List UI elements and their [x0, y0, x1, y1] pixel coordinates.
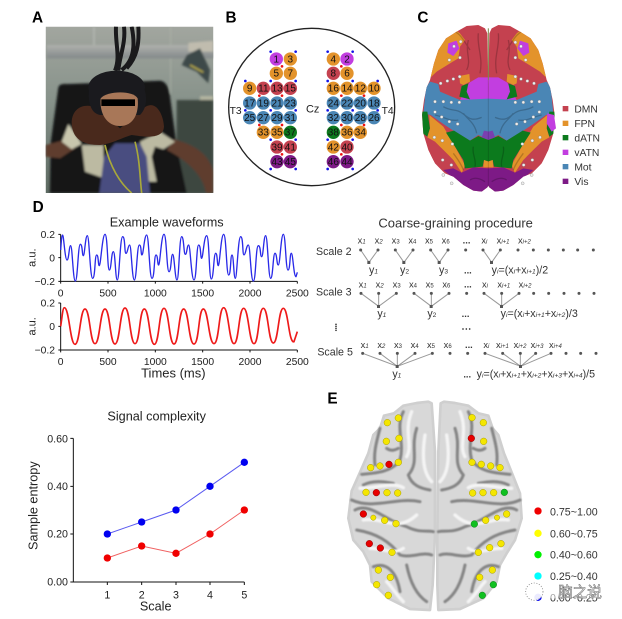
y tick labels: 0.00 [47, 577, 68, 589]
scale 2 diagram: y [400, 264, 406, 276]
scale 2 diagram [316, 236, 595, 276]
scale 3 diagram: x [442, 280, 447, 290]
red waveform chart: 1000 [144, 357, 167, 368]
scale 3 diagram: x [376, 280, 381, 290]
channel numbers: 6 [344, 69, 350, 80]
channel numbers: 41 [285, 142, 296, 153]
network legend: Vis [574, 177, 589, 188]
panel D: signal complexity chart [26, 410, 248, 614]
scale 2 diagram: x [358, 236, 363, 246]
scale 3 diagram: 1 [383, 312, 387, 319]
scale 5 diagram: 1 [365, 344, 369, 350]
scale 2 diagram: x [425, 236, 430, 246]
red waveform chart: 1500 [191, 357, 214, 368]
scale 5 diagram: i+2 [518, 344, 527, 350]
landmarks: Cz [306, 104, 319, 116]
x tick labels: 3 [173, 590, 179, 602]
blue waveform chart: 1500 [191, 288, 214, 299]
scale 5 diagram: x [549, 340, 554, 350]
yellow markers [363, 414, 510, 599]
head outline [229, 28, 395, 186]
label D: D [33, 199, 44, 216]
scale 3 diagram: x [426, 280, 431, 290]
scale 2 diagram: 1 [362, 240, 366, 246]
channel numbers: 21 [271, 98, 283, 109]
coarse-graining title: Coarse-graining procedure [378, 216, 533, 231]
scale 5 diagram: i [488, 344, 490, 350]
scale 3 diagram: x [409, 280, 414, 290]
scale 5 diagram: Scale 5 [317, 347, 353, 359]
red waveform chart: 0 [49, 322, 55, 333]
scale 3 diagram: 3 [397, 284, 401, 290]
red waveform chart: 2500 [286, 357, 309, 368]
scale 3 diagram [316, 280, 595, 320]
scale 2 diagram: x [442, 236, 447, 246]
probe positions [433, 40, 541, 185]
chart title: Signal complexity [107, 410, 207, 424]
landmarks: T3 [230, 106, 242, 117]
channel numbers: 30 [341, 113, 353, 124]
blue waveform chart: 2000 [239, 288, 262, 299]
scale 5 diagram: 6 [448, 344, 452, 350]
red waveform chart [27, 299, 309, 380]
scale 2 diagram: y [492, 264, 498, 276]
y axis title: Sample entropy [26, 461, 40, 550]
channel numbers: 36 [341, 128, 353, 139]
channel numbers: 3 [288, 54, 294, 65]
censor bar [101, 99, 135, 106]
y tick labels: 0.20 [47, 529, 68, 541]
channel numbers: 24 [328, 98, 339, 109]
red waveform chart: 0 [58, 357, 64, 368]
blue waveform chart: 0 [49, 253, 55, 264]
channel numbers: 20 [355, 98, 366, 109]
scale 2 diagram: 5 [430, 240, 434, 246]
scale 2 diagram: i+2 [523, 240, 531, 246]
network legend: FPN [574, 119, 595, 130]
scale 5 diagram: x [514, 340, 519, 350]
scale 5 diagram: 2 [381, 344, 386, 350]
channel numbers: 44 [341, 157, 353, 168]
scale 3 diagram: ... [464, 280, 472, 290]
red waveform chart: a.u. [27, 317, 39, 335]
scale 5 diagram: x [531, 340, 536, 350]
red waveform chart: Times (ms) [141, 365, 206, 380]
scale 2 diagram: 2 [405, 268, 409, 275]
scale 2 diagram: 6 [446, 240, 450, 246]
channel numbers: 37 [285, 128, 296, 139]
x tick labels: 4 [207, 590, 213, 602]
scale 3 diagram: 4 [414, 284, 418, 290]
scale 3 diagram: 2 [433, 312, 437, 319]
scale 5 diagram: i+1 [501, 344, 509, 350]
scale 5 diagram: y [392, 369, 398, 381]
channel numbers: 46 [328, 157, 339, 168]
network legend: vATN [574, 148, 599, 159]
channel numbers: 42 [328, 142, 339, 153]
scale 3 diagram: x [359, 280, 364, 290]
x axis title: Scale [140, 600, 172, 614]
channel numbers [244, 54, 380, 168]
network legend [563, 104, 600, 188]
scale 2 diagram: ... [464, 265, 472, 275]
scale 5 diagram: 4 [415, 344, 419, 350]
scale 5 diagram: x [444, 340, 449, 350]
scale 2 diagram: Scale 2 [316, 246, 352, 258]
red series [104, 506, 248, 562]
scale 5 diagram [317, 340, 597, 381]
x tick labels [104, 590, 247, 602]
blue waveform chart: 500 [99, 288, 117, 299]
blue waveform chart [27, 230, 309, 299]
value legend: 0.00~0.25 [550, 592, 598, 604]
scale 5 diagram: x [496, 340, 501, 350]
channel numbers: 34 [355, 128, 366, 139]
x tick labels: 5 [241, 590, 247, 602]
scale 2 diagram: y [439, 264, 445, 276]
panel A: photo of child wearing fNIRS cap [32, 9, 213, 193]
label A: A [32, 9, 43, 26]
channel numbers: 45 [285, 157, 296, 168]
channel numbers: 14 [341, 84, 353, 95]
channel numbers: 35 [271, 128, 283, 139]
channel numbers: 26 [368, 113, 380, 124]
scale 5 diagram: x [483, 340, 488, 350]
channel numbers: 28 [355, 113, 366, 124]
landmarks [230, 104, 394, 117]
blue waveform chart: a.u. [27, 249, 39, 267]
scale 2 diagram: x [375, 236, 380, 246]
axes [70, 438, 244, 585]
label E: E [327, 390, 338, 407]
scale 3 diagram: 6 [447, 284, 451, 290]
green markers [471, 489, 508, 599]
channel numbers: 13 [271, 84, 283, 95]
channel numbers: 40 [341, 142, 353, 153]
landmarks: T4 [382, 106, 394, 117]
channel numbers: 39 [271, 142, 283, 153]
y tick labels: 0.60 [47, 433, 68, 445]
channel numbers: 10 [368, 84, 380, 95]
scale 2 diagram: x [518, 236, 523, 246]
red waveform chart: −0.2 [35, 346, 55, 357]
scale 5 diagram: 5 [432, 344, 436, 350]
scale 3 diagram: y [377, 308, 383, 320]
channel numbers: 16 [328, 84, 339, 95]
channel numbers: 18 [368, 98, 380, 109]
source dots [258, 65, 365, 156]
channel numbers: 31 [285, 113, 296, 124]
panel D: coarse-graining procedure [316, 216, 597, 381]
channel numbers: 2 [344, 54, 350, 65]
blue waveform chart: 0.2 [41, 230, 55, 241]
channel numbers: 43 [271, 157, 283, 168]
scale 3 diagram: x [519, 280, 524, 290]
scale 5 diagram: x [361, 340, 366, 350]
network legend: Mot [574, 162, 592, 173]
scale 3 diagram: ... [462, 309, 469, 319]
panel C: brain network parcellation [417, 9, 600, 193]
scale 2 diagram: i+1 [501, 240, 509, 246]
scale 5 diagram: i=(xi+xi+1+xi+2+xi+3+xi+4)/5 [482, 369, 595, 381]
brain map [420, 23, 557, 193]
scale 3 diagram: i [487, 284, 489, 290]
label C: C [417, 9, 428, 26]
scale 5 diagram: 1 [398, 373, 402, 380]
scale 5 diagram: ... [463, 370, 471, 380]
scale 5 diagram: x [377, 340, 382, 350]
value legend [534, 507, 598, 604]
scale 2 diagram: i [486, 240, 488, 246]
channel numbers: 19 [258, 98, 269, 109]
blue waveform chart: 0 [58, 288, 64, 299]
scale 3 diagram: Scale 3 [316, 286, 352, 298]
blue waveform chart: −0.2 [35, 277, 55, 288]
value legend: 0.60~0.75 [550, 528, 598, 540]
panel B: electrode layout [225, 9, 395, 186]
channel numbers: 8 [331, 69, 337, 80]
scale 2 diagram: 2 [378, 240, 383, 246]
y tick labels: 0.40 [47, 481, 68, 493]
x tick labels: 1 [104, 590, 110, 602]
channel numbers: 27 [258, 113, 269, 124]
scale 5 diagram: x [411, 340, 416, 350]
channel numbers: 11 [258, 84, 269, 95]
scale 3 diagram: y [427, 308, 433, 320]
channel numbers: 22 [341, 98, 353, 109]
scale 3 diagram: x [393, 280, 398, 290]
scale 3 diagram: i=(xi+xi+1+xi+2)/3 [506, 308, 578, 320]
ellipsis between scales [335, 323, 470, 331]
red waveform chart: 2000 [239, 357, 262, 368]
panel E: brain map of values [327, 390, 605, 610]
scale 5 diagram: x [427, 340, 432, 350]
scale 5 diagram: 3 [399, 344, 403, 350]
channel numbers: 25 [244, 113, 256, 124]
blue waveform chart: 2500 [286, 288, 309, 299]
label B: B [225, 9, 237, 26]
channel numbers: 15 [285, 84, 296, 95]
grey brain surface [348, 402, 522, 610]
scale 2 diagram: 4 [413, 240, 417, 246]
scale 3 diagram: 2 [379, 284, 384, 290]
waveforms title: Example waveforms [110, 216, 224, 230]
scale 5 diagram: x [394, 340, 399, 350]
scale 3 diagram: i+1 [502, 284, 510, 290]
red waveform chart: 0.2 [41, 299, 55, 310]
scale 2 diagram: ... [463, 236, 470, 246]
scale 5 diagram: ... [465, 340, 473, 350]
scale 3 diagram: 1 [363, 284, 367, 290]
scale 2 diagram: y [369, 264, 375, 276]
electrode channels [243, 52, 381, 168]
scale 3 diagram: i+2 [523, 284, 532, 290]
blue series [104, 459, 248, 538]
value legend: 0.25~0.40 [550, 571, 598, 583]
scale 5 diagram: i+3 [535, 344, 544, 350]
x tick labels: 2 [139, 590, 145, 602]
red markers [360, 435, 475, 551]
scale 2 diagram: i=(xi+xi+1)/2 [497, 264, 548, 276]
scale 5 diagram: y [477, 369, 483, 381]
network legend: DMN [574, 104, 598, 115]
channel numbers: 5 [274, 69, 280, 80]
scale 2 diagram: x [481, 236, 486, 246]
scale 2 diagram: x [497, 236, 502, 246]
channel numbers: 12 [355, 84, 366, 95]
channel numbers: 32 [328, 113, 339, 124]
channel numbers: 23 [285, 98, 296, 109]
channel numbers: 7 [288, 69, 294, 80]
photo [46, 27, 213, 193]
channel numbers: 4 [331, 54, 337, 65]
channel numbers: 29 [271, 113, 283, 124]
scale 5 diagram: i+4 [554, 344, 562, 350]
scale 2 diagram: 3 [396, 240, 400, 246]
red waveform chart: 500 [99, 357, 117, 368]
channel numbers: 1 [274, 54, 280, 65]
panel D: example waveforms [27, 199, 309, 380]
scale 2 diagram: 1 [374, 268, 378, 275]
channel numbers: 33 [258, 128, 269, 139]
value legend: 0.40~0.60 [550, 550, 598, 562]
watermark: 脑之说 [558, 584, 602, 601]
channel numbers: 9 [247, 84, 253, 95]
channel numbers: 38 [328, 128, 339, 139]
scale 3 diagram: x [482, 280, 487, 290]
value legend: 0.75~1.00 [550, 507, 598, 519]
detector dots [244, 50, 379, 170]
scale 3 diagram: y [501, 308, 507, 320]
scale 3 diagram: x [497, 280, 502, 290]
watermark [526, 583, 605, 601]
y tick labels [47, 433, 68, 589]
scale 2 diagram: x [392, 236, 397, 246]
channel numbers: 17 [244, 98, 256, 109]
scale 3 diagram: 5 [430, 284, 434, 290]
scale 2 diagram: x [408, 236, 413, 246]
blue waveform chart: 1000 [144, 288, 167, 299]
network legend: dATN [574, 133, 600, 144]
scale 2 diagram: 3 [444, 268, 448, 275]
